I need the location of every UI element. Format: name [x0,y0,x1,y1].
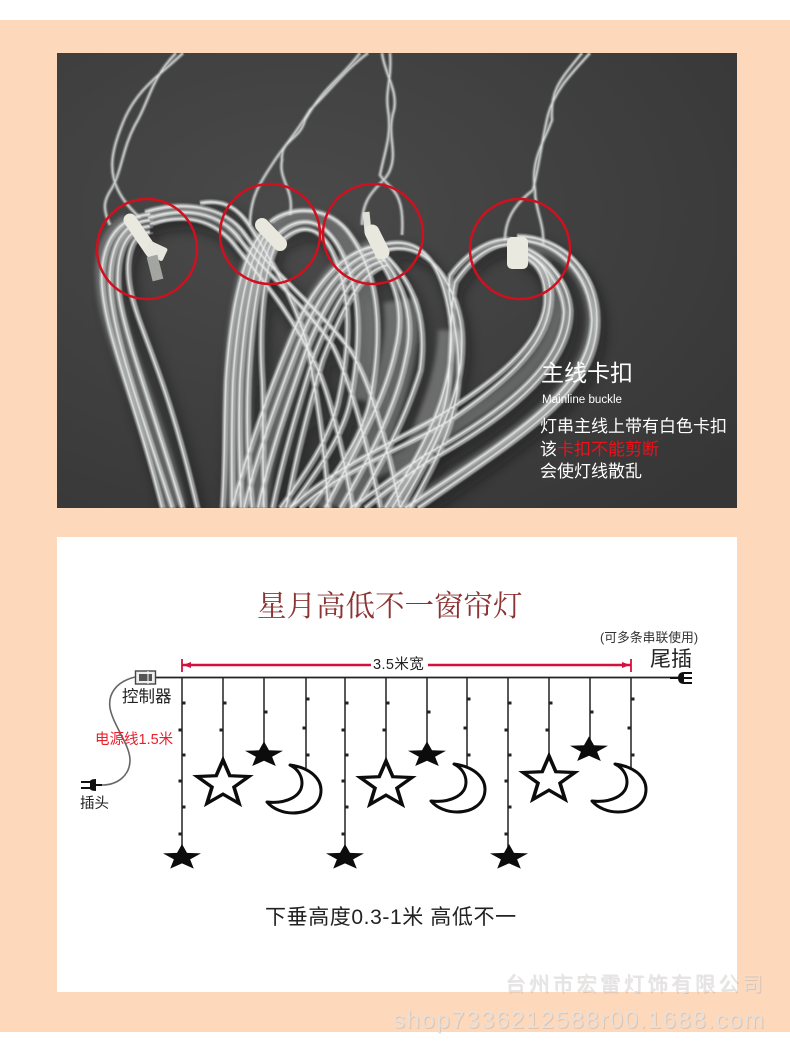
power cord label: 电源线1.5米 [95,731,174,748]
watermark [393,973,766,1034]
power plug icon [81,779,102,791]
buckle 1 [130,220,168,280]
hanging wires [182,677,631,848]
panel: photo of mainline buckles [57,53,737,516]
buckle 3 [366,212,382,252]
main wire [135,676,680,678]
caption English: Mainline buckle [542,394,622,406]
caption heading: 主线卡扣 [541,360,633,386]
red circles [97,184,570,299]
photo caption [540,360,727,481]
moons [267,764,646,813]
width dimension [182,656,631,673]
width dimension: 3.5米宽 [373,656,424,673]
controller label: 控制器 [122,687,172,706]
twisted feed wires [105,53,590,245]
buckle 2 [262,225,280,244]
watermark shop url: shop7336212588r00.1688.com [393,1007,766,1034]
drop height note: 下垂高度0.3-1米 高低不一 [265,906,517,929]
panel: diagram [57,537,737,992]
plug label: 插头 [80,795,109,812]
watermark company: 台州市宏雷灯饰有限公司 [505,973,766,996]
tail plug icon [670,672,692,684]
caption line 3: 会使灯线散乱 [540,461,642,481]
diagram title: 星月高低不一窗帘灯 [257,590,523,623]
translucent wire mass [107,211,592,508]
light string bundles [102,202,600,509]
caption line 1: 灯串主线上带有白色卡扣 [540,417,727,436]
caption line 2: 该卡扣不能剪断 [540,440,659,459]
filled stars [163,736,608,869]
wire shadows [107,210,602,516]
tail plug label: 尾插 [650,648,692,671]
series note: (可多条串联使用) [600,630,698,645]
power cord [102,677,135,785]
controller [136,671,156,684]
outline stars [197,756,575,804]
LED dots [178,699,634,834]
buckle 4 [507,237,528,269]
